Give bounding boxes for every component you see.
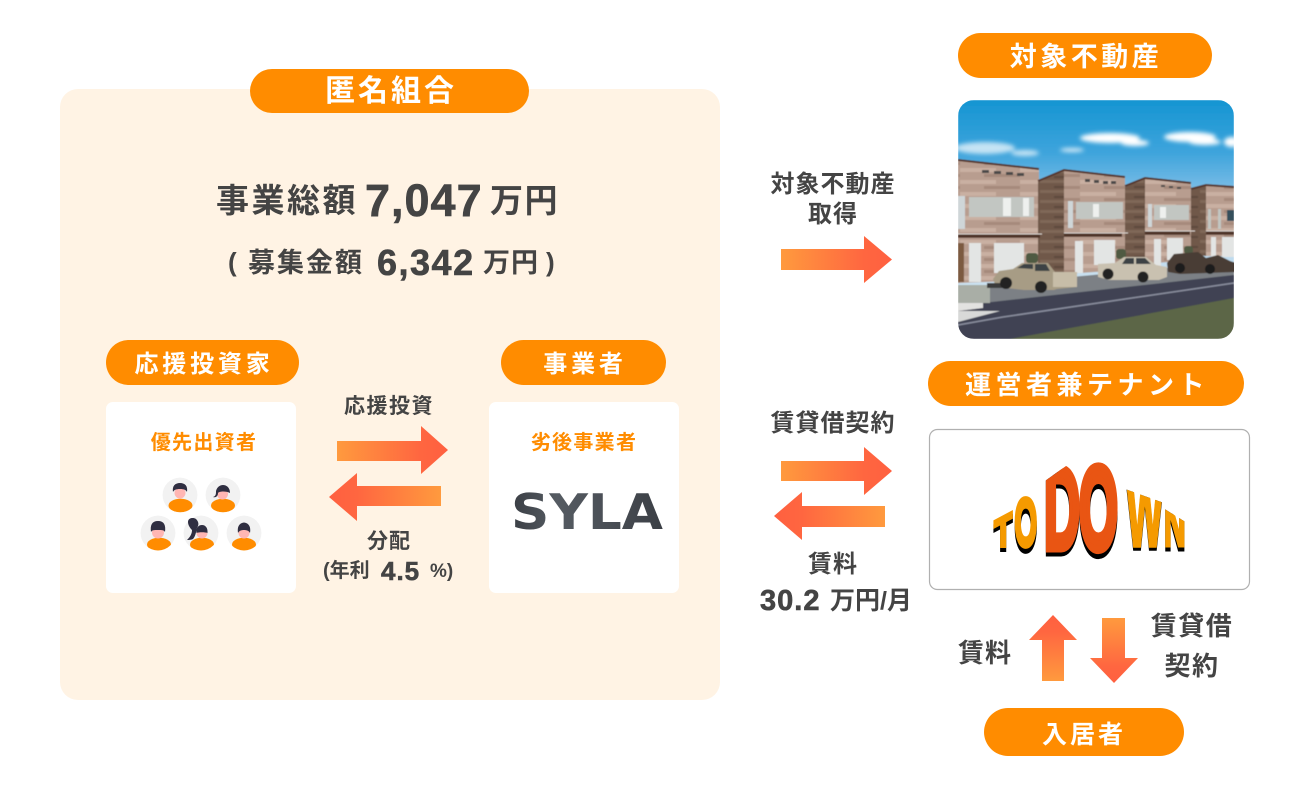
total amount: 万円 [490, 182, 559, 219]
recruitment amount [228, 242, 555, 283]
logo: SYLA: SYLA [511, 484, 663, 541]
pill: 対象不動産: 対象不動産 [1010, 42, 1162, 72]
recruitment amount: ( [228, 247, 237, 277]
recruitment amount: ) [546, 247, 555, 277]
logo: TODOWN: O [1014, 491, 1037, 567]
logo: TODOWN: T [994, 506, 1012, 572]
label: annual interest: %) [430, 561, 453, 582]
label: 対象不動産取得: 取得 [808, 201, 858, 228]
pill: 応援投資家: 応援投資家 [134, 351, 274, 378]
card: 優先出資者: 優先出資者 [151, 431, 257, 454]
logo: TODOWN: O [1079, 449, 1118, 580]
pill: 運営者兼テナント: 運営者兼テナント [965, 370, 1209, 400]
label: annual interest [323, 556, 453, 586]
arrow: lease contract [781, 447, 892, 495]
label: 賃貸借契約 tenant: 契約 [1164, 651, 1220, 681]
arrow: rent [774, 492, 885, 540]
photo: target property [955, 100, 1240, 339]
pill: 入居者 [984, 708, 1184, 756]
arrow: distribution [329, 473, 441, 521]
icon: ponytail [187, 518, 198, 540]
label: 賃貸借契約 tenant [1151, 611, 1233, 681]
logo: TODOWN: D [1044, 448, 1080, 579]
recruitment amount: 募集金額 [248, 248, 364, 278]
logo: TODOWN: T [994, 502, 1012, 568]
logo: TODOWN: W [1127, 467, 1163, 569]
logo: TODOWN: O [1014, 486, 1037, 562]
recruitment amount: 万円 [483, 248, 539, 278]
box: TODOWN logo [930, 430, 1250, 590]
ground [989, 268, 1234, 303]
label: 賃料: 賃料 [808, 551, 858, 578]
cars [987, 252, 1236, 293]
pill: 事業者: 事業者 [543, 351, 627, 378]
arrow: acquisition [781, 236, 892, 283]
pill: 事業者 [501, 340, 666, 385]
logo: TODOWN: N [1164, 495, 1186, 564]
label: 賃貸借契約 tenant: 賃貸借 [1151, 611, 1233, 641]
heading pill: 匿名組合: 匿名組合 [325, 75, 457, 108]
label: 賃貸借契約: 賃貸借契約 [770, 410, 896, 437]
label: monthly rent: 30.2 [760, 585, 820, 617]
logo: TODOWN [993, 462, 1184, 560]
total amount: 事業総額 [216, 182, 358, 219]
label: annual interest: (年利 [323, 559, 370, 582]
panel: 匿名組合 [60, 69, 720, 700]
total amount [216, 175, 559, 226]
windows [982, 170, 1181, 189]
label: 対象不動産取得 [770, 171, 896, 228]
pill: 運営者兼テナント [928, 361, 1244, 406]
label: monthly rent [760, 585, 912, 617]
arrow: down [1090, 618, 1138, 683]
icon: investors [140, 478, 262, 551]
logo: TODOWN: W [1127, 464, 1163, 566]
label: 応援投資: 応援投資 [344, 395, 434, 418]
card: 優先出資者 [106, 402, 296, 593]
label: 対象不動産取得: 対象不動産 [770, 171, 896, 198]
card: 劣後事業者: 劣後事業者 [531, 431, 637, 454]
logo: TODOWN: N [1164, 491, 1186, 560]
total amount: 7,047 [365, 175, 483, 226]
heading pill: 匿名組合 [250, 69, 529, 113]
arrow: investment [337, 426, 448, 474]
pill: 応援投資家 [106, 340, 299, 385]
pill: 対象不動産 [958, 33, 1212, 78]
label: 分配: 分配 [367, 530, 411, 553]
logo: TODOWN: O [1079, 444, 1118, 575]
label: 賃料 tenant: 賃料 [958, 638, 1012, 668]
card: 劣後事業者 [489, 402, 679, 593]
logo: TODOWN: D [1044, 444, 1080, 575]
recruitment amount: 6,342 [377, 242, 475, 283]
pill: 入居者: 入居者 [1042, 721, 1126, 749]
label: monthly rent: 万円/月 [830, 587, 912, 615]
label: annual interest: 4.5 [381, 556, 420, 586]
arrow: up [1029, 615, 1077, 681]
buildings [958, 160, 1039, 283]
